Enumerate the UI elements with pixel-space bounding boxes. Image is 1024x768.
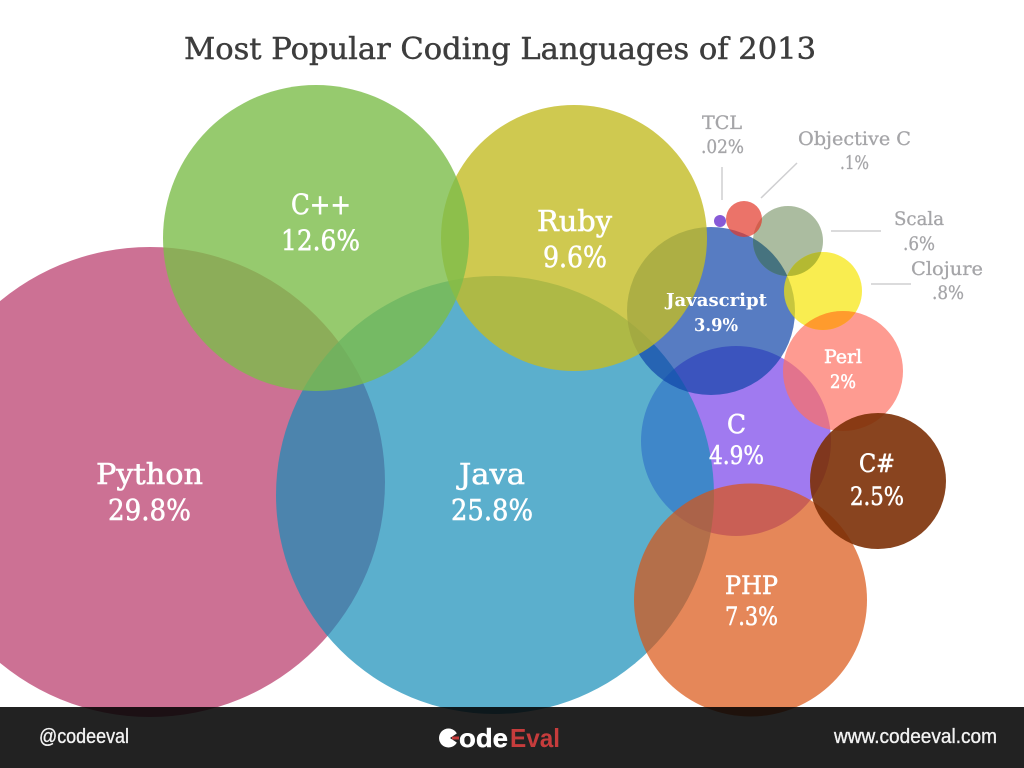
callout: Objective C: Objective C <box>798 128 911 150</box>
bubble chart <box>0 85 946 717</box>
callout: Clojure <box>871 258 983 304</box>
label: Java: 25.8% <box>451 493 533 527</box>
callout: Scala <box>831 208 944 255</box>
label: Python: Python <box>96 457 203 491</box>
callout: TCL: TCL <box>702 112 742 134</box>
callout: Scala: .6% <box>903 233 935 255</box>
label: C#: C# <box>859 449 895 478</box>
label: Python: 29.8% <box>108 493 191 527</box>
overlap: Clojure and Perl <box>804 311 856 330</box>
bubble: Clojure <box>784 252 862 330</box>
footer: CodeEval logo <box>439 723 560 753</box>
callout: Clojure: Clojure <box>911 258 983 280</box>
bubble: C <box>641 346 831 536</box>
footer bar <box>0 707 1024 768</box>
callout: Clojure: .8% <box>932 282 964 304</box>
bubble: Java <box>276 276 714 714</box>
title: Most Popular Coding Languages of 2013 <box>184 32 816 67</box>
bubble: Scala <box>753 206 823 276</box>
logo mark: C with arrow notch <box>439 728 459 748</box>
label: C: 4.9% <box>709 441 764 470</box>
label: C: C <box>727 410 746 440</box>
label: Javascript: Javascript <box>664 290 768 311</box>
label: C++ <box>281 188 360 257</box>
overlap: Javascript and Scala <box>753 238 788 276</box>
label: C# <box>850 449 904 511</box>
label: C#: 2.5% <box>850 482 904 511</box>
footer: website: www.codeeval.com <box>833 726 997 748</box>
bubble: TCL <box>714 215 726 227</box>
logo wordmark: ode <box>459 723 508 753</box>
overlap: Clojure and Scala <box>787 252 822 276</box>
label: Javascript: 3.9% <box>694 315 738 336</box>
label: Java <box>451 457 533 527</box>
callout: Scala: Scala <box>894 208 944 230</box>
label: Perl: 2% <box>830 371 856 393</box>
label: PHP <box>725 571 778 631</box>
bubble: C# <box>810 413 946 549</box>
label: Ruby <box>537 204 613 274</box>
label: C <box>709 410 764 470</box>
callout: TCL <box>701 112 744 200</box>
bubble: Javascript <box>627 227 795 395</box>
bubble: Ruby <box>441 105 707 371</box>
logo wordmark accent: Eval <box>510 723 560 753</box>
label: Python <box>96 457 203 527</box>
label: Ruby: Ruby <box>537 204 613 238</box>
callout: TCL: .02% <box>701 136 744 158</box>
callout: Objective C: .1% <box>840 152 869 174</box>
bubble: C++ <box>163 85 469 391</box>
label: C++: 12.6% <box>281 224 360 257</box>
bubble: Python <box>0 247 385 717</box>
bubble: Perl <box>783 311 903 431</box>
footer: twitter handle: @codeeval <box>39 726 129 748</box>
label: PHP: PHP <box>725 571 778 600</box>
label: Perl <box>824 346 862 393</box>
label: PHP: 7.3% <box>725 602 778 631</box>
label: Perl: Perl <box>824 346 862 368</box>
label: Javascript <box>664 290 768 336</box>
bubble: Objective C <box>726 201 762 237</box>
label: Ruby: 9.6% <box>543 240 607 274</box>
label: C++: C++ <box>291 188 351 221</box>
label: Java: Java <box>456 457 525 491</box>
bubble: PHP <box>634 484 867 716</box>
callout: Objective C <box>761 128 911 198</box>
